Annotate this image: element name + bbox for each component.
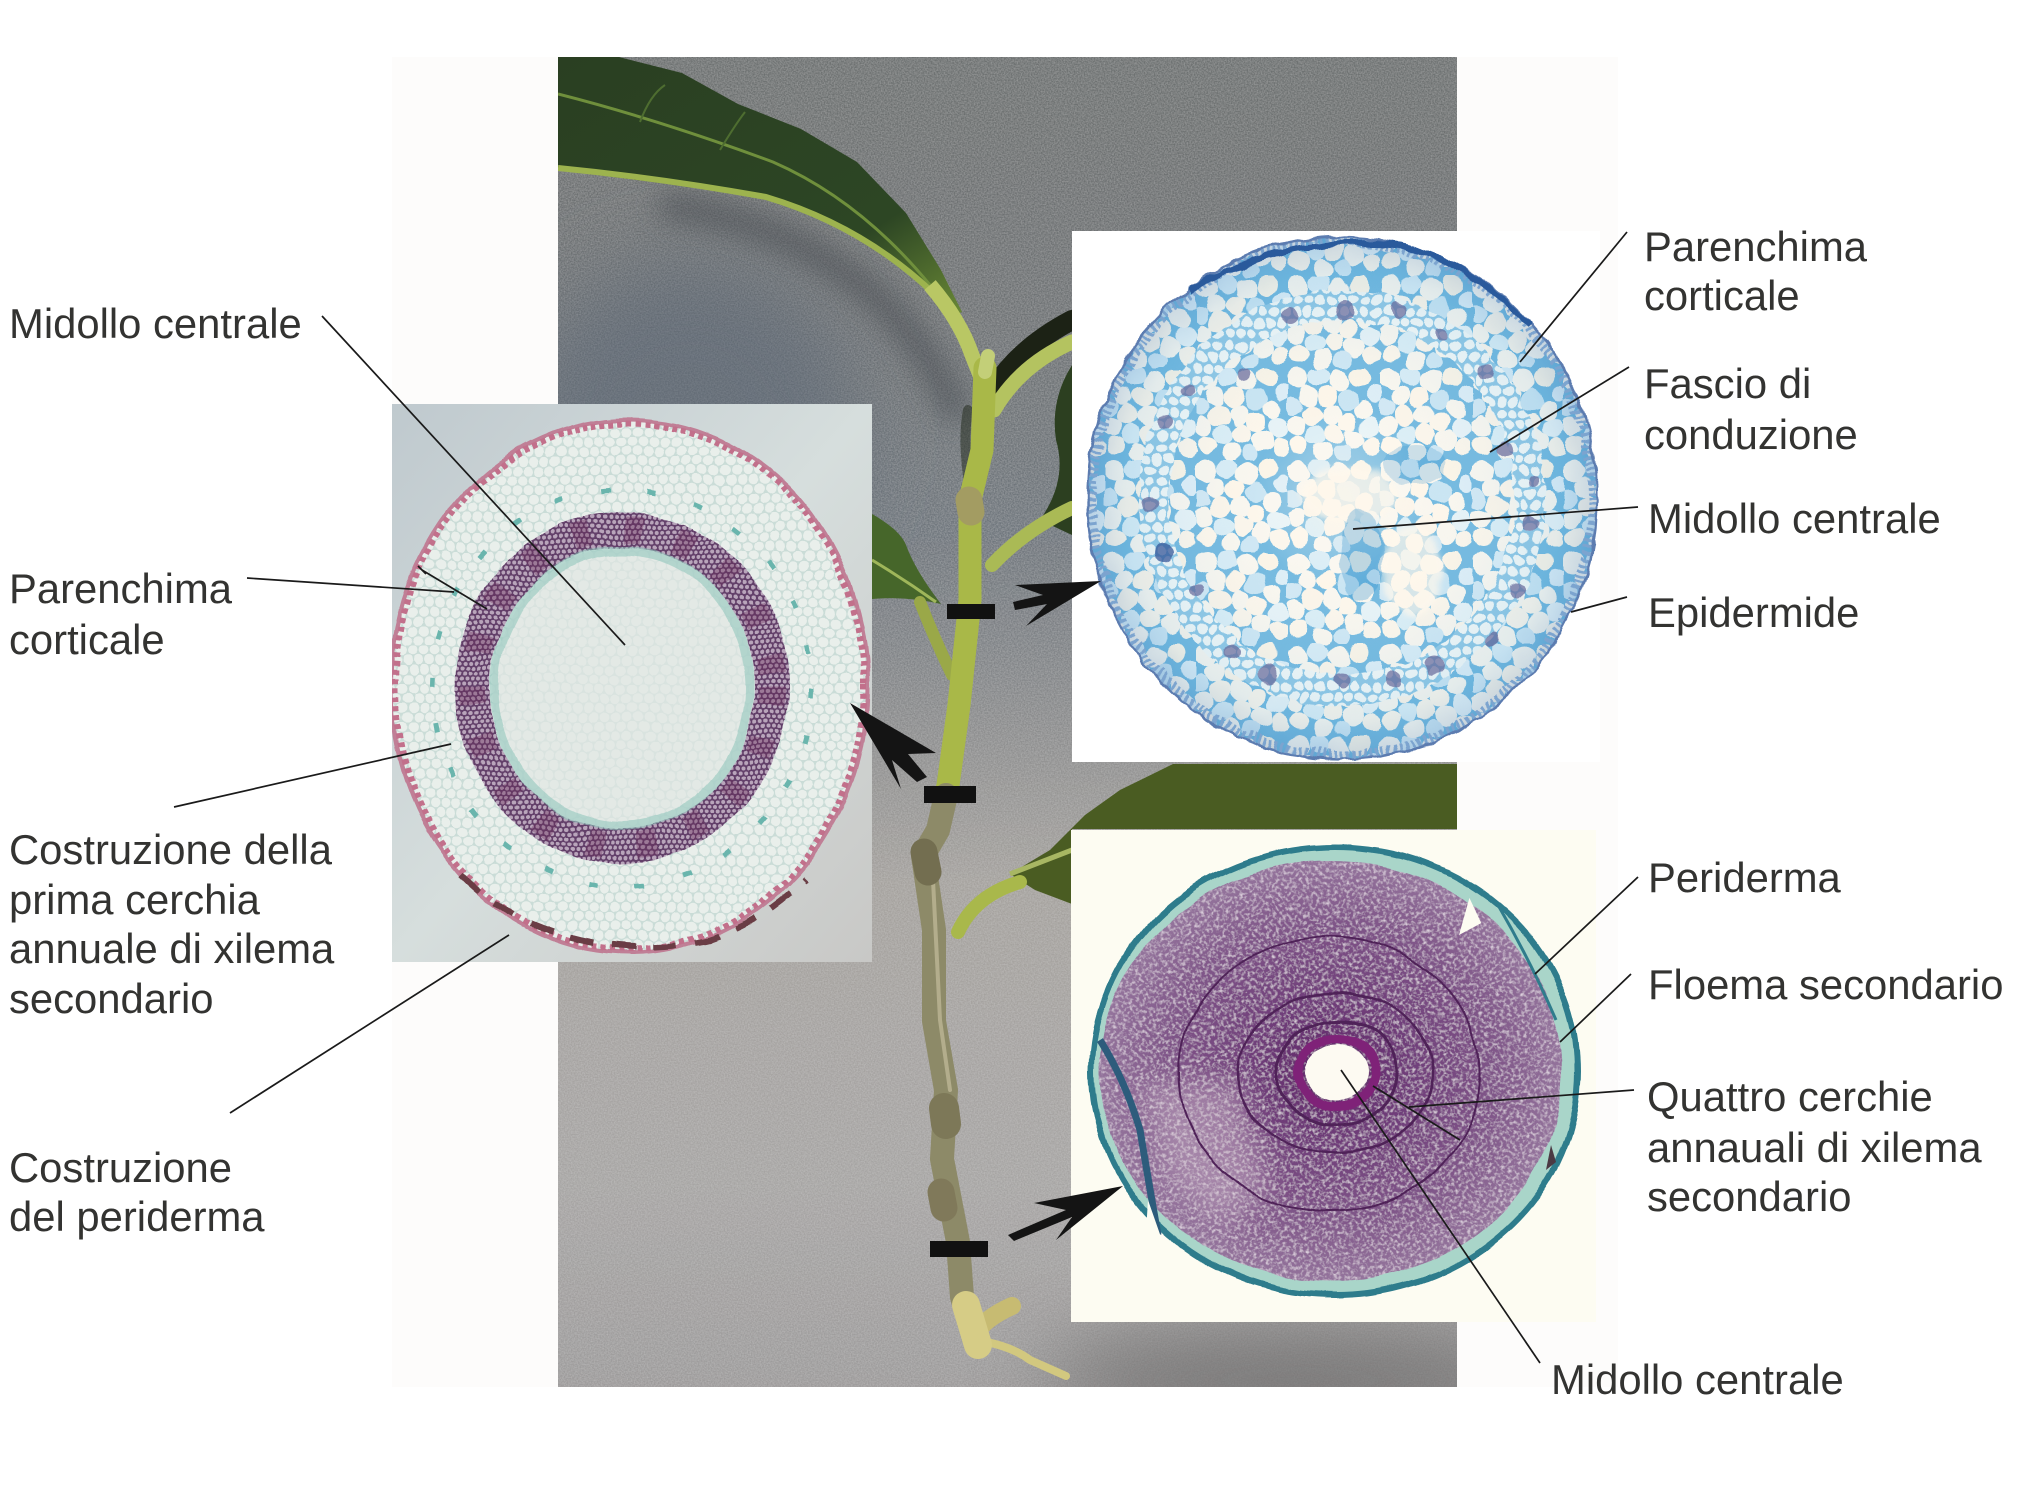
white page background panel [392, 57, 1618, 1387]
panel: top right micrograph, blue section [1072, 231, 1600, 762]
label: Costruzione del periderma: Costruzione [9, 1144, 232, 1191]
label: Quattro cerchie annauali di xilema secondario: secondario [1647, 1173, 1851, 1220]
cortex spots [432, 490, 812, 886]
panel: bottom right micrograph, purple section [1071, 830, 1596, 1322]
panel: left micrograph, young stem section [391, 404, 872, 962]
dark periderm patches [462, 876, 805, 947]
label: Epidermide: Epidermide [1648, 589, 1859, 636]
label: Costruzione della prima cerchia: secondario [9, 975, 213, 1022]
plant photograph [558, 57, 1457, 1387]
label: Costruzione della prima cerchia: Costruzione della [9, 826, 332, 873]
xylem body [1100, 861, 1562, 1281]
label: Costruzione del periderma: del periderma [9, 1193, 265, 1240]
periderm and phloem rim [1092, 847, 1578, 1295]
label: Fascio di conduzione: conduzione [1644, 411, 1858, 458]
arrow: to blue section [1013, 581, 1101, 626]
central pith highlight [1302, 467, 1398, 523]
label: Parenchima corticale, right: corticale [1644, 272, 1800, 319]
pale sector [1140, 1080, 1270, 1225]
label: Costruzione della prima cerchia: prima cerchia [9, 876, 261, 923]
vascular ring [472, 530, 772, 846]
label: Parenchima corticale, right: Parenchima [1644, 223, 1867, 270]
vascular bundles [1142, 301, 1539, 688]
label: Parenchima corticale, left: Parenchima [9, 565, 232, 612]
label: Quattro cerchie annauali di xilema secondario: annauali di xilema [1647, 1124, 1982, 1171]
annual rings [1180, 936, 1480, 1212]
bark cracks and tear [1100, 905, 1556, 1240]
central pith [1306, 1044, 1368, 1100]
arrow: to purple section [1008, 1186, 1123, 1241]
central pith [492, 548, 756, 832]
label: Midollo centrale, bottom: Midollo centrale [1551, 1356, 1844, 1403]
label: Costruzione della prima cerchia: annuale di xilema [9, 925, 335, 972]
label: Floema secondario: Floema secondario [1648, 961, 2003, 1008]
label: Periderma: Periderma [1648, 854, 1842, 901]
marker bar: lower cut [930, 1241, 988, 1257]
leaf: right behind branches [1040, 365, 1072, 535]
leaf: top large leaf [558, 57, 982, 380]
cortex and epidermis ring [391, 419, 867, 953]
leaf: left small leaf [872, 514, 941, 604]
leaf: lower leaf [1010, 764, 1457, 904]
branches [920, 320, 1072, 932]
stem [923, 356, 1066, 1376]
leader lines [174, 232, 1638, 1363]
label: Quattro cerchie annauali di xilema secondario: Quattro cerchie [1647, 1073, 1933, 1120]
label: Parenchima corticale, left: corticale [9, 616, 165, 663]
marker bar: upper cut [947, 604, 995, 619]
label: Midollo centrale, right: Midollo centrale [1648, 495, 1941, 542]
leaf shadow on background [660, 205, 960, 420]
label: Midollo centrale, left: Midollo centrale [9, 300, 302, 347]
blue patches [1340, 509, 1384, 601]
label: Fascio di conduzione: Fascio di [1644, 360, 1811, 407]
arrow: to left section [850, 703, 936, 789]
marker bar: middle cut [924, 786, 976, 803]
